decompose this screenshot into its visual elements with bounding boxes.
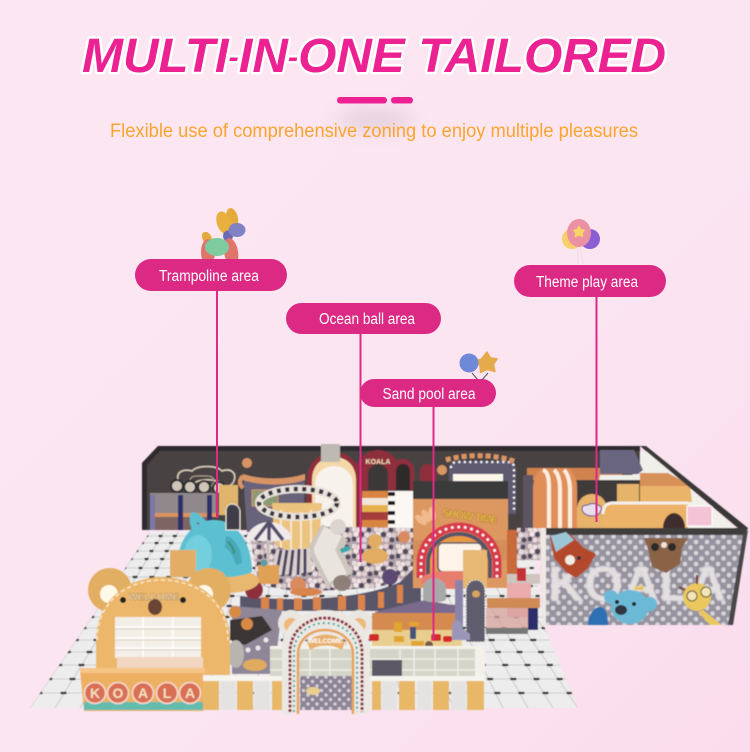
title: ONE TAILORED bbox=[298, 30, 666, 83]
arch inner floor bbox=[300, 676, 352, 710]
blue elephant dome bbox=[170, 512, 263, 599]
tan box and dark arch panel bbox=[452, 550, 487, 642]
show time tower bbox=[413, 456, 516, 602]
callout: theme play area: Theme play area bbox=[536, 274, 638, 291]
tower right side shelving bbox=[486, 528, 541, 634]
koala welcome booth bbox=[80, 568, 231, 711]
white arch with cube bbox=[307, 444, 361, 530]
arch welcome sign bbox=[307, 634, 345, 650]
arch floor mascot bbox=[306, 687, 320, 695]
leader line: ocean ball bbox=[360, 333, 362, 562]
leader line: trampoline bbox=[216, 290, 218, 518]
callout: ocean ball area: Ocean ball area bbox=[319, 311, 415, 328]
stair stripes and piano keys bbox=[362, 491, 415, 533]
striped ramp bbox=[272, 548, 312, 576]
white tube slide bbox=[324, 519, 351, 591]
playground scene bbox=[30, 444, 749, 715]
koala arch and back decor bbox=[356, 450, 447, 490]
fence panels bbox=[203, 680, 484, 710]
title: MULTI bbox=[82, 30, 225, 83]
leader line: sand pool bbox=[432, 406, 434, 640]
koala welcome booth: K bbox=[90, 685, 100, 701]
mural penguin bbox=[588, 607, 608, 625]
show time sign: SHOW TIME bbox=[441, 507, 499, 527]
mural fox bbox=[550, 532, 596, 578]
booth counter bbox=[80, 670, 203, 711]
title: - bbox=[229, 41, 239, 74]
arch window bbox=[438, 543, 482, 572]
striped umbrella bbox=[246, 522, 292, 564]
salmon stage bbox=[420, 571, 486, 589]
koala mural wall bbox=[540, 528, 748, 627]
koala welcome booth: A bbox=[138, 685, 148, 701]
welcome arch fence bbox=[203, 676, 484, 710]
front shelves bbox=[270, 646, 485, 682]
booth welcome text: WELCOME bbox=[129, 592, 179, 602]
elephant right ear bbox=[225, 536, 242, 565]
mural blue koala bbox=[604, 584, 657, 624]
booth head bbox=[96, 577, 230, 675]
mural KOALA letters: KOALA bbox=[548, 556, 726, 612]
callout: sand pool area bbox=[360, 379, 496, 407]
mural giraffe bbox=[679, 575, 722, 625]
back wall bbox=[142, 446, 640, 530]
welcome arch bbox=[278, 610, 372, 714]
grey seat bbox=[423, 578, 446, 602]
fence top rail bbox=[203, 676, 484, 681]
tan box bbox=[170, 550, 196, 577]
floor tiles bbox=[30, 532, 578, 708]
title divider dashes bbox=[337, 97, 413, 129]
welcome arch: WELCOME bbox=[308, 638, 343, 645]
mural bear bbox=[644, 538, 688, 573]
elephant left ear bbox=[190, 512, 208, 530]
bear cylinder bbox=[577, 494, 607, 528]
arch ears bbox=[278, 610, 372, 636]
elephant body bbox=[178, 520, 252, 577]
pool rim bbox=[240, 568, 458, 615]
callout: theme play area bbox=[514, 265, 666, 297]
booth face bbox=[120, 597, 186, 615]
mushroom stools and toys bbox=[258, 531, 410, 593]
leader line: theme play bbox=[596, 296, 598, 522]
icon: balloons and star bbox=[460, 352, 497, 380]
koala arch and back decor: KOALA bbox=[366, 459, 390, 466]
right perimeter wall bbox=[640, 446, 748, 528]
title: - bbox=[288, 41, 298, 74]
callout: trampoline area: Trampoline area bbox=[159, 268, 259, 285]
tan tower and arch panel behind elephant bbox=[219, 485, 240, 530]
sand pool bbox=[369, 613, 462, 650]
title: IN bbox=[239, 30, 289, 83]
purple and orange turret bbox=[240, 458, 305, 532]
left playground floor bbox=[228, 606, 282, 674]
marquee frame bbox=[446, 456, 516, 514]
koala welcome booth: A bbox=[185, 685, 195, 701]
booth ears bbox=[88, 568, 231, 612]
koala welcome booth: L bbox=[163, 685, 172, 701]
KOALA letter discs bbox=[84, 682, 200, 704]
subtitle: Flexible use of comprehensive zoning to enjoy multiple pleasures bbox=[110, 121, 638, 142]
arch bead ring bbox=[290, 618, 362, 712]
rainbow arch bbox=[421, 527, 497, 578]
orange slide bbox=[523, 468, 622, 528]
glass railing bbox=[150, 493, 218, 530]
callout: ocean ball area bbox=[286, 303, 441, 334]
right side rooms bbox=[577, 450, 735, 528]
icon: balloon dog bbox=[200, 207, 246, 267]
feather fan bbox=[413, 506, 437, 527]
arch body bbox=[282, 610, 370, 714]
koala welcome booth: O bbox=[113, 685, 124, 701]
callout: trampoline area bbox=[135, 259, 287, 291]
carousel drum bbox=[259, 489, 337, 551]
icon: party balloons bbox=[562, 219, 600, 264]
ball pool bbox=[250, 526, 416, 592]
booth shelves bbox=[115, 617, 203, 671]
callout: sand pool area: Sand pool area bbox=[382, 386, 476, 403]
